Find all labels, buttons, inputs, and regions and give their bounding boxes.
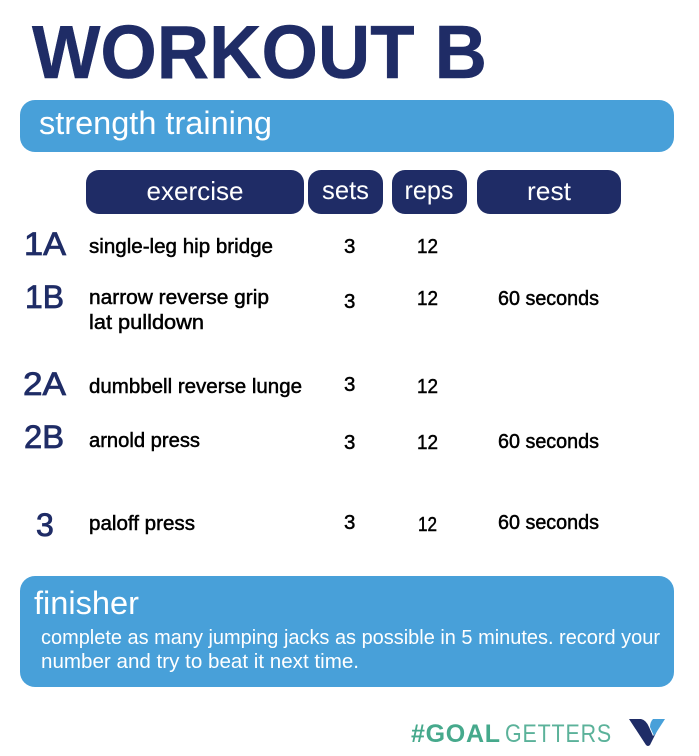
row 1B: 1B	[25, 279, 64, 315]
row 1A: 1A	[24, 226, 67, 262]
hashtag: #goalgetters	[411, 720, 612, 748]
header: reps: reps	[404, 175, 454, 205]
row 2A: 2A	[23, 366, 67, 402]
title: WORKOUT B	[32, 10, 487, 94]
row 3	[36, 507, 599, 543]
row 2A: dumbbell reverse lunge	[89, 375, 302, 398]
finisher heading: finisher	[34, 585, 139, 621]
header: rest: rest	[527, 176, 572, 206]
row 2A	[23, 366, 438, 402]
row 2B: 2B	[24, 419, 64, 455]
hashtag: #goalgetters: GETTERS	[505, 720, 612, 748]
finisher text	[41, 627, 660, 673]
table header	[86, 170, 621, 214]
row 2B: 3	[344, 431, 355, 454]
row 1A: 12	[417, 235, 438, 258]
row 2B: arnold press	[89, 429, 200, 452]
hashtag: #goalgetters: #GOAL	[411, 720, 500, 748]
row 2A: 3	[344, 373, 355, 396]
row 3: paloff press	[89, 512, 195, 535]
header: sets	[308, 170, 383, 214]
row 3: 3	[36, 507, 54, 543]
row 1B: narrow reverse grip	[89, 286, 269, 309]
row 1B: 3	[344, 290, 355, 313]
header: reps	[392, 170, 467, 214]
row 1B: 12	[417, 287, 438, 310]
header: exercise: exercise	[146, 176, 244, 206]
row 1B: 60 seconds	[498, 287, 599, 310]
finisher text: number and try to beat it next time.	[41, 651, 359, 673]
row 2A: 12	[417, 375, 438, 398]
banner: strength training: strength training	[39, 105, 272, 141]
row 1A: 3	[344, 235, 355, 258]
row 3: 60 seconds	[498, 511, 599, 534]
row 3: 3	[344, 511, 355, 534]
row 2B	[24, 419, 599, 455]
row 1A	[24, 226, 438, 262]
header: exercise	[86, 170, 304, 214]
row 1B: lat pulldown	[89, 311, 204, 334]
panel: finisher	[20, 576, 674, 687]
row 1B	[25, 279, 599, 334]
row 3: 12	[418, 513, 437, 536]
finisher text: complete as many jumping jacks as possible in 5 minutes. record your	[41, 627, 660, 649]
row 2B: 60 seconds	[498, 430, 599, 453]
header: rest	[477, 170, 621, 214]
icon: V logo	[629, 719, 665, 746]
banner: strength training	[20, 100, 674, 152]
row 1A: single-leg hip bridge	[89, 235, 273, 258]
header: sets: sets	[322, 175, 369, 205]
row 2B: 12	[417, 431, 438, 454]
